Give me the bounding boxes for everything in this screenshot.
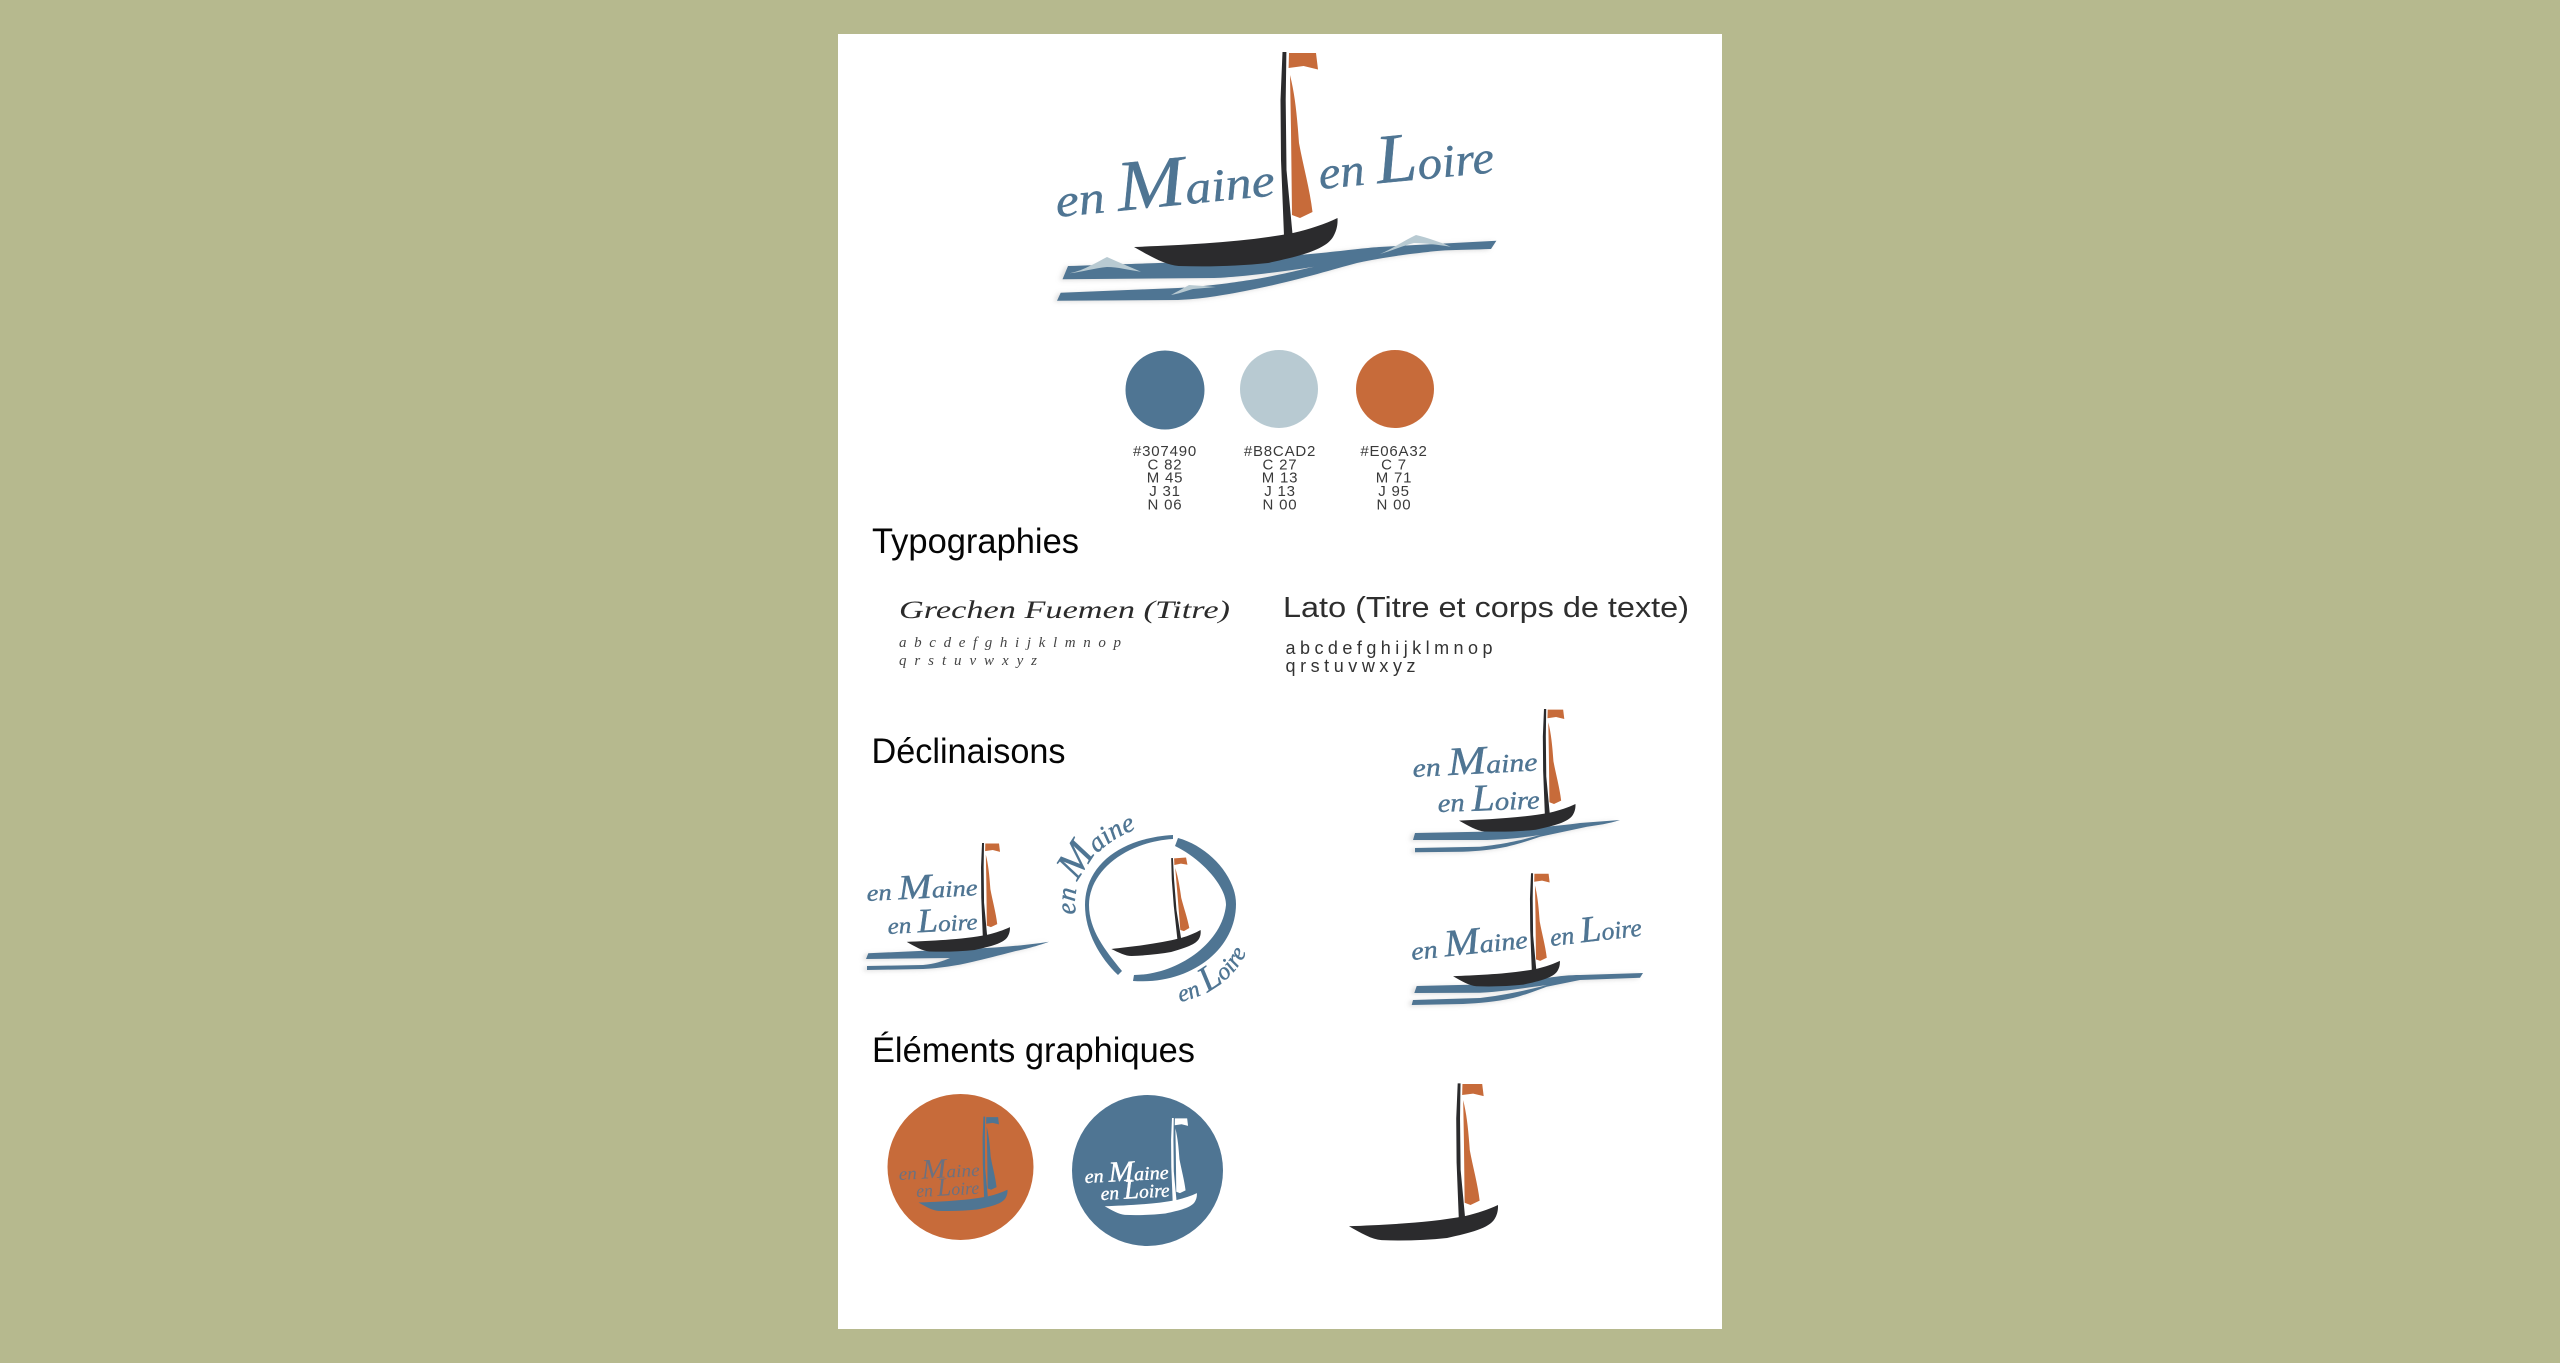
colour swatch: blue: M 45 xyxy=(1147,470,1183,487)
colour swatch: orange: N 00 xyxy=(1377,496,1411,513)
icon: boat alone xyxy=(1349,1083,1498,1240)
wordmark: en Maine xyxy=(1411,735,1538,786)
wordmark: en Maine xyxy=(1409,915,1529,969)
boat xyxy=(1134,52,1338,266)
badge: blue xyxy=(1072,1095,1223,1246)
wave crests xyxy=(1070,235,1451,295)
variant: horizontal logo right: en Loire xyxy=(1547,904,1643,955)
colour swatch: light grey-blue: C 27 xyxy=(1263,456,1297,473)
typeface sample: Grechen Fuemen xyxy=(899,597,1230,669)
boat xyxy=(907,843,1010,952)
colour swatch: light grey-blue: M 13 xyxy=(1262,470,1298,487)
main logo xyxy=(1051,52,1497,301)
curved wordmark: en Loire: en Loire xyxy=(1179,948,1245,1002)
wordmark: en Loire: en Loire xyxy=(1314,111,1497,205)
colour swatch: orange xyxy=(1356,350,1434,513)
colour swatch: light grey-blue xyxy=(1240,350,1318,513)
typeface sample: Lato: Lato (Titre et corps de texte) xyxy=(1283,592,1689,624)
typeface sample: Lato: a b c d e f g h i j k l m n o p xyxy=(1286,638,1492,658)
colour swatch: blue: C 82 xyxy=(1148,456,1182,473)
typeface sample: Grechen Fuemen: a b c d e f g h i j k l m n o p xyxy=(899,635,1122,651)
colour swatch: orange: J 95 xyxy=(1378,483,1410,500)
typeface sample: Lato xyxy=(1283,592,1689,676)
boat xyxy=(1105,856,1202,958)
badge: blue: en Loire xyxy=(1100,1172,1170,1206)
boat xyxy=(1453,873,1560,986)
variant: stacked logo right xyxy=(1411,709,1620,852)
colour swatch: light grey-blue: J 13 xyxy=(1264,483,1296,500)
colour swatch: light grey-blue: #B8CAD2 xyxy=(1244,443,1316,460)
variant: stacked logo left xyxy=(865,843,1049,970)
white sheet xyxy=(838,34,1722,1329)
wordmark: en Maine xyxy=(898,1152,980,1187)
colour swatch: orange: M 71 xyxy=(1376,470,1412,487)
curved wordmark: en Maine: en Maine xyxy=(1056,818,1134,914)
ring xyxy=(1085,835,1173,975)
badge: orange: en Loire xyxy=(915,1171,980,1203)
water xyxy=(1057,241,1496,301)
water xyxy=(1413,820,1620,852)
heading: Déclinaisons: Déclinaisons xyxy=(872,732,1066,771)
colour swatch: blue: N 06 xyxy=(1148,496,1182,513)
water xyxy=(866,942,1049,970)
wordmark: en Maine xyxy=(1084,1154,1169,1190)
badge: orange xyxy=(888,1094,1034,1240)
variant: stacked logo left: en Loire xyxy=(886,900,978,942)
water xyxy=(1412,973,1643,1005)
typeface sample: Grechen Fuemen: Grechen Fuemen (Titre) xyxy=(899,597,1230,624)
boat xyxy=(1459,709,1575,832)
variant: circular logo xyxy=(1056,818,1245,1002)
typeface sample: Lato: q r s t u v w x y z xyxy=(1286,656,1416,676)
colour swatch: blue xyxy=(1126,350,1204,513)
wordmark: en Maine xyxy=(865,864,978,909)
heading: Éléments graphiques: Éléments graphiques xyxy=(872,1031,1195,1070)
colour swatch: blue: #307490 xyxy=(1133,443,1197,460)
wordmark: en Maine: en Maine xyxy=(1051,131,1278,233)
variant: stacked logo right: en Loire xyxy=(1437,775,1540,821)
typeface sample: Grechen Fuemen: q r s t u v w x y z xyxy=(899,653,1037,669)
boat xyxy=(919,1117,1008,1211)
heading: Typographies: Typographies xyxy=(872,522,1079,561)
colour swatch: light grey-blue: N 00 xyxy=(1263,496,1297,513)
boat xyxy=(1105,1118,1197,1215)
colour swatch: orange: #E06A32 xyxy=(1360,443,1428,460)
colour swatch: orange: C 7 xyxy=(1381,456,1407,473)
variant: horizontal logo right xyxy=(1409,873,1643,1005)
colour swatch: blue: J 31 xyxy=(1149,483,1181,500)
